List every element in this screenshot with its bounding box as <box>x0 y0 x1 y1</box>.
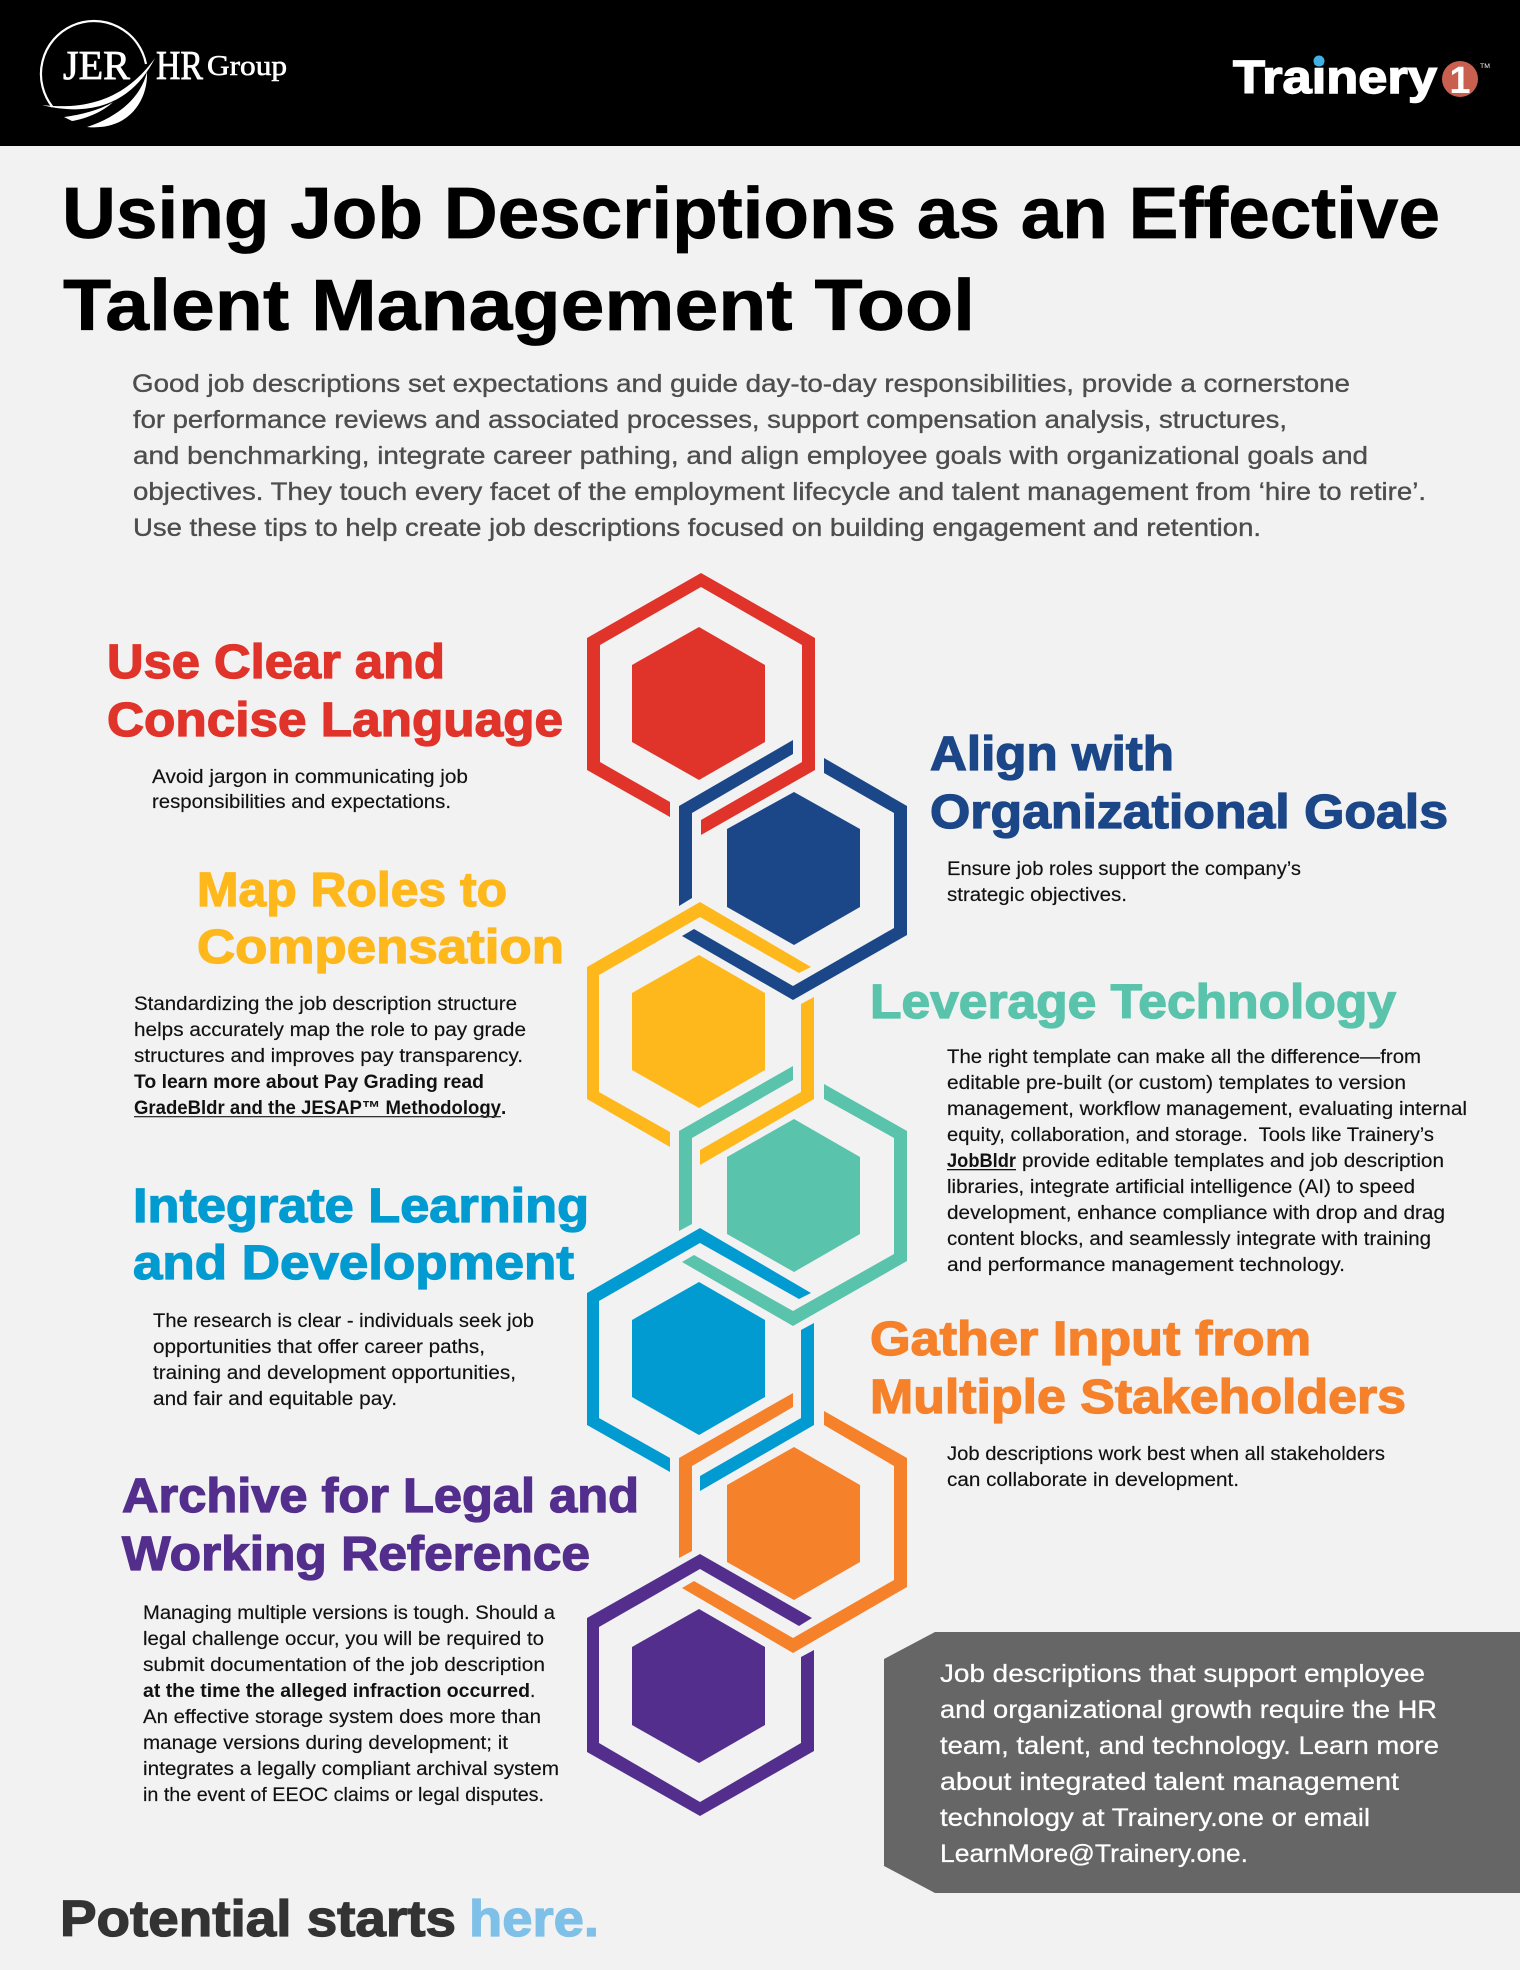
body: integrate learning <box>153 1311 534 1410</box>
body: align goals: strategic objectives. <box>947 885 1127 906</box>
body: align goals <box>947 859 1301 906</box>
panel: gather input <box>870 1313 1406 1491</box>
body: integrate learning: training and development opportunities, <box>153 1363 516 1384</box>
body: leverage technology: management, workflow management, evaluating internal <box>947 1099 1467 1120</box>
heading: Archive for Legal and Working Reference <box>122 1470 639 1581</box>
body: integrate learning: and fair and equitable pay. <box>153 1389 397 1410</box>
body: integrate learning: opportunities that offer career paths, <box>153 1337 485 1358</box>
heading: Archive for Legal and Working Reference: Archive for Legal and <box>122 1470 639 1523</box>
heading: Gather Input from Multiple Stakeholders: Gather Input from <box>870 1313 1311 1366</box>
body: map roles: . <box>501 1098 506 1119</box>
body: gather input: can collaborate in development. <box>947 1470 1239 1491</box>
intro paragraph <box>132 370 1426 542</box>
callout: about integrated talent management <box>940 1768 1399 1796</box>
intro paragraph: Good job descriptions set expectations and guide day-to-day responsibilities, provide a cornerstone <box>132 370 1350 398</box>
body: leverage technology: content blocks, and seamlessly integrate with training <box>947 1229 1431 1250</box>
callout: technology at Trainery.one or email <box>940 1804 1370 1832</box>
body: leverage technology: libraries, integrate artificial intelligence (AI) to speed <box>947 1177 1415 1198</box>
hexagon: navy <box>679 740 907 1000</box>
logo: JER HR Group: JER <box>63 42 131 88</box>
body: leverage technology <box>947 1047 1467 1276</box>
heading: Map Roles to Compensation <box>197 864 564 974</box>
hexagon: teal <box>679 1066 907 1326</box>
body: gather input: Job descriptions work best when all stakeholders <box>947 1444 1385 1465</box>
logo: JER HR Group: Group <box>207 51 287 82</box>
heading: Align with Organizational Goals <box>930 728 1448 839</box>
callout: and organizational growth require the HR <box>940 1696 1437 1724</box>
body: map roles: To learn more about Pay Grading read <box>134 1072 484 1093</box>
body: clear language <box>152 767 468 813</box>
body: leverage technology: provide editable templates and job description <box>1022 1151 1444 1172</box>
body: archive <box>143 1603 559 1806</box>
body: archive: at the time the alleged infraction occurred <box>143 1681 530 1702</box>
tagline <box>60 1890 599 1947</box>
heading: Integrate Learning and Development: and Development <box>133 1237 574 1290</box>
hexagon chain <box>587 573 907 1816</box>
callout: LearnMore@Trainery.one. <box>940 1840 1248 1868</box>
tagline: here. <box>469 1890 599 1947</box>
body: archive: An effective storage system does more than <box>143 1707 541 1728</box>
title: Using Job Descriptions as an Effective <box>62 174 1440 254</box>
heading: Align with Organizational Goals: Organizational Goals <box>930 786 1448 839</box>
logo: Trainery One: Trainery <box>1233 51 1437 103</box>
heading: Map Roles to Compensation: Map Roles to <box>197 864 507 917</box>
body: map roles: structures and improves pay transparency. <box>134 1046 523 1067</box>
body: archive: submit documentation of the job description <box>143 1655 545 1676</box>
panel: archive <box>122 1470 639 1806</box>
heading: Map Roles to Compensation: Compensation <box>197 921 564 974</box>
body: leverage technology: equity, collaboration, and storage. Tools like Trainery’s <box>947 1125 1434 1146</box>
body: leverage technology: and performance management technology. <box>947 1255 1345 1276</box>
logo: JER HR Group <box>41 21 287 127</box>
panel: leverage technology <box>870 976 1467 1276</box>
body: clear language: Avoid jargon in communicating job <box>152 767 468 788</box>
body: clear language: responsibilities and expectations. <box>152 792 451 813</box>
heading: Gather Input from Multiple Stakeholders: Multiple Stakeholders <box>870 1371 1406 1424</box>
hexagon: sky blue <box>587 1228 814 1491</box>
tagline: Potential starts <box>60 1890 456 1947</box>
hexagon: orange <box>679 1393 907 1653</box>
panel: clear language <box>107 636 563 813</box>
body: map roles: GradeBldr and the JESAP™ Methodology <box>134 1098 501 1119</box>
body: archive: in the event of EEOC claims or legal disputes. <box>143 1785 544 1806</box>
body: leverage technology: JobBldr <box>947 1151 1017 1172</box>
heading: Use Clear and Concise Language: Use Clear and <box>107 636 445 689</box>
body: archive: Managing multiple versions is tough. Should a <box>143 1603 555 1624</box>
intro paragraph: and benchmarking, integrate career pathing, and align employee goals with organizational goals and <box>133 442 1368 470</box>
title: Talent Management Tool <box>63 266 975 346</box>
heading: Integrate Learning and Development: Integrate Learning <box>133 1180 589 1233</box>
body: archive: integrates a legally compliant archival system <box>143 1759 559 1780</box>
body: archive: manage versions during development; it <box>143 1733 509 1754</box>
callout: team, talent, and technology. Learn more <box>940 1732 1439 1760</box>
callout <box>884 1632 1520 1893</box>
heading: Integrate Learning and Development <box>133 1180 589 1290</box>
body: map roles: Standardizing the job description structure <box>134 994 517 1015</box>
logo: Trainery One <box>1233 51 1490 103</box>
heading: Use Clear and Concise Language <box>107 636 563 747</box>
intro paragraph: Use these tips to help create job descriptions focused on building engagement and retention. <box>133 514 1261 542</box>
heading: Gather Input from Multiple Stakeholders <box>870 1313 1406 1424</box>
panel: integrate learning <box>133 1180 589 1410</box>
hexagon: red <box>587 573 815 835</box>
body: gather input <box>947 1444 1385 1491</box>
hexagon: yellow <box>587 902 814 1165</box>
callout: Job descriptions that support employee <box>940 1660 1425 1688</box>
body: leverage technology: The right template can make all the difference—from <box>947 1047 1421 1068</box>
heading: Archive for Legal and Working Reference: Working Reference <box>122 1528 590 1581</box>
body: map roles: helps accurately map the role to pay grade <box>134 1020 526 1041</box>
body: integrate learning: The research is clear - individuals seek job <box>153 1311 534 1332</box>
body: leverage technology: editable pre-built (or custom) templates to version <box>947 1073 1406 1094</box>
heading: Use Clear and Concise Language: Concise Language <box>107 694 563 747</box>
logo: Trainery One: 1 <box>1449 60 1471 102</box>
intro paragraph: for performance reviews and associated processes, support compensation analysis, structures, <box>133 406 1287 434</box>
body: leverage technology: development, enhance compliance with drop and drag <box>947 1203 1445 1224</box>
body: archive: legal challenge occur, you will be required to <box>143 1629 544 1650</box>
panel: map roles <box>134 864 564 1119</box>
heading: Leverage Technology: Leverage Technology <box>870 976 1396 1029</box>
hexagon: purple <box>587 1554 814 1816</box>
logo: Trainery One: TM <box>1480 64 1490 70</box>
header bar <box>0 0 1520 146</box>
heading: Align with Organizational Goals: Align with <box>930 728 1174 781</box>
panel: align goals <box>930 728 1448 906</box>
body: archive: . <box>530 1681 535 1702</box>
title <box>62 174 1440 346</box>
logo: JER HR Group: HR <box>156 42 204 88</box>
intro paragraph: objectives. They touch every facet of the employment lifecycle and talent management from ‘hire to retire’. <box>133 478 1426 506</box>
body: align goals: Ensure job roles support the company’s <box>947 859 1301 880</box>
body: map roles <box>134 994 526 1119</box>
